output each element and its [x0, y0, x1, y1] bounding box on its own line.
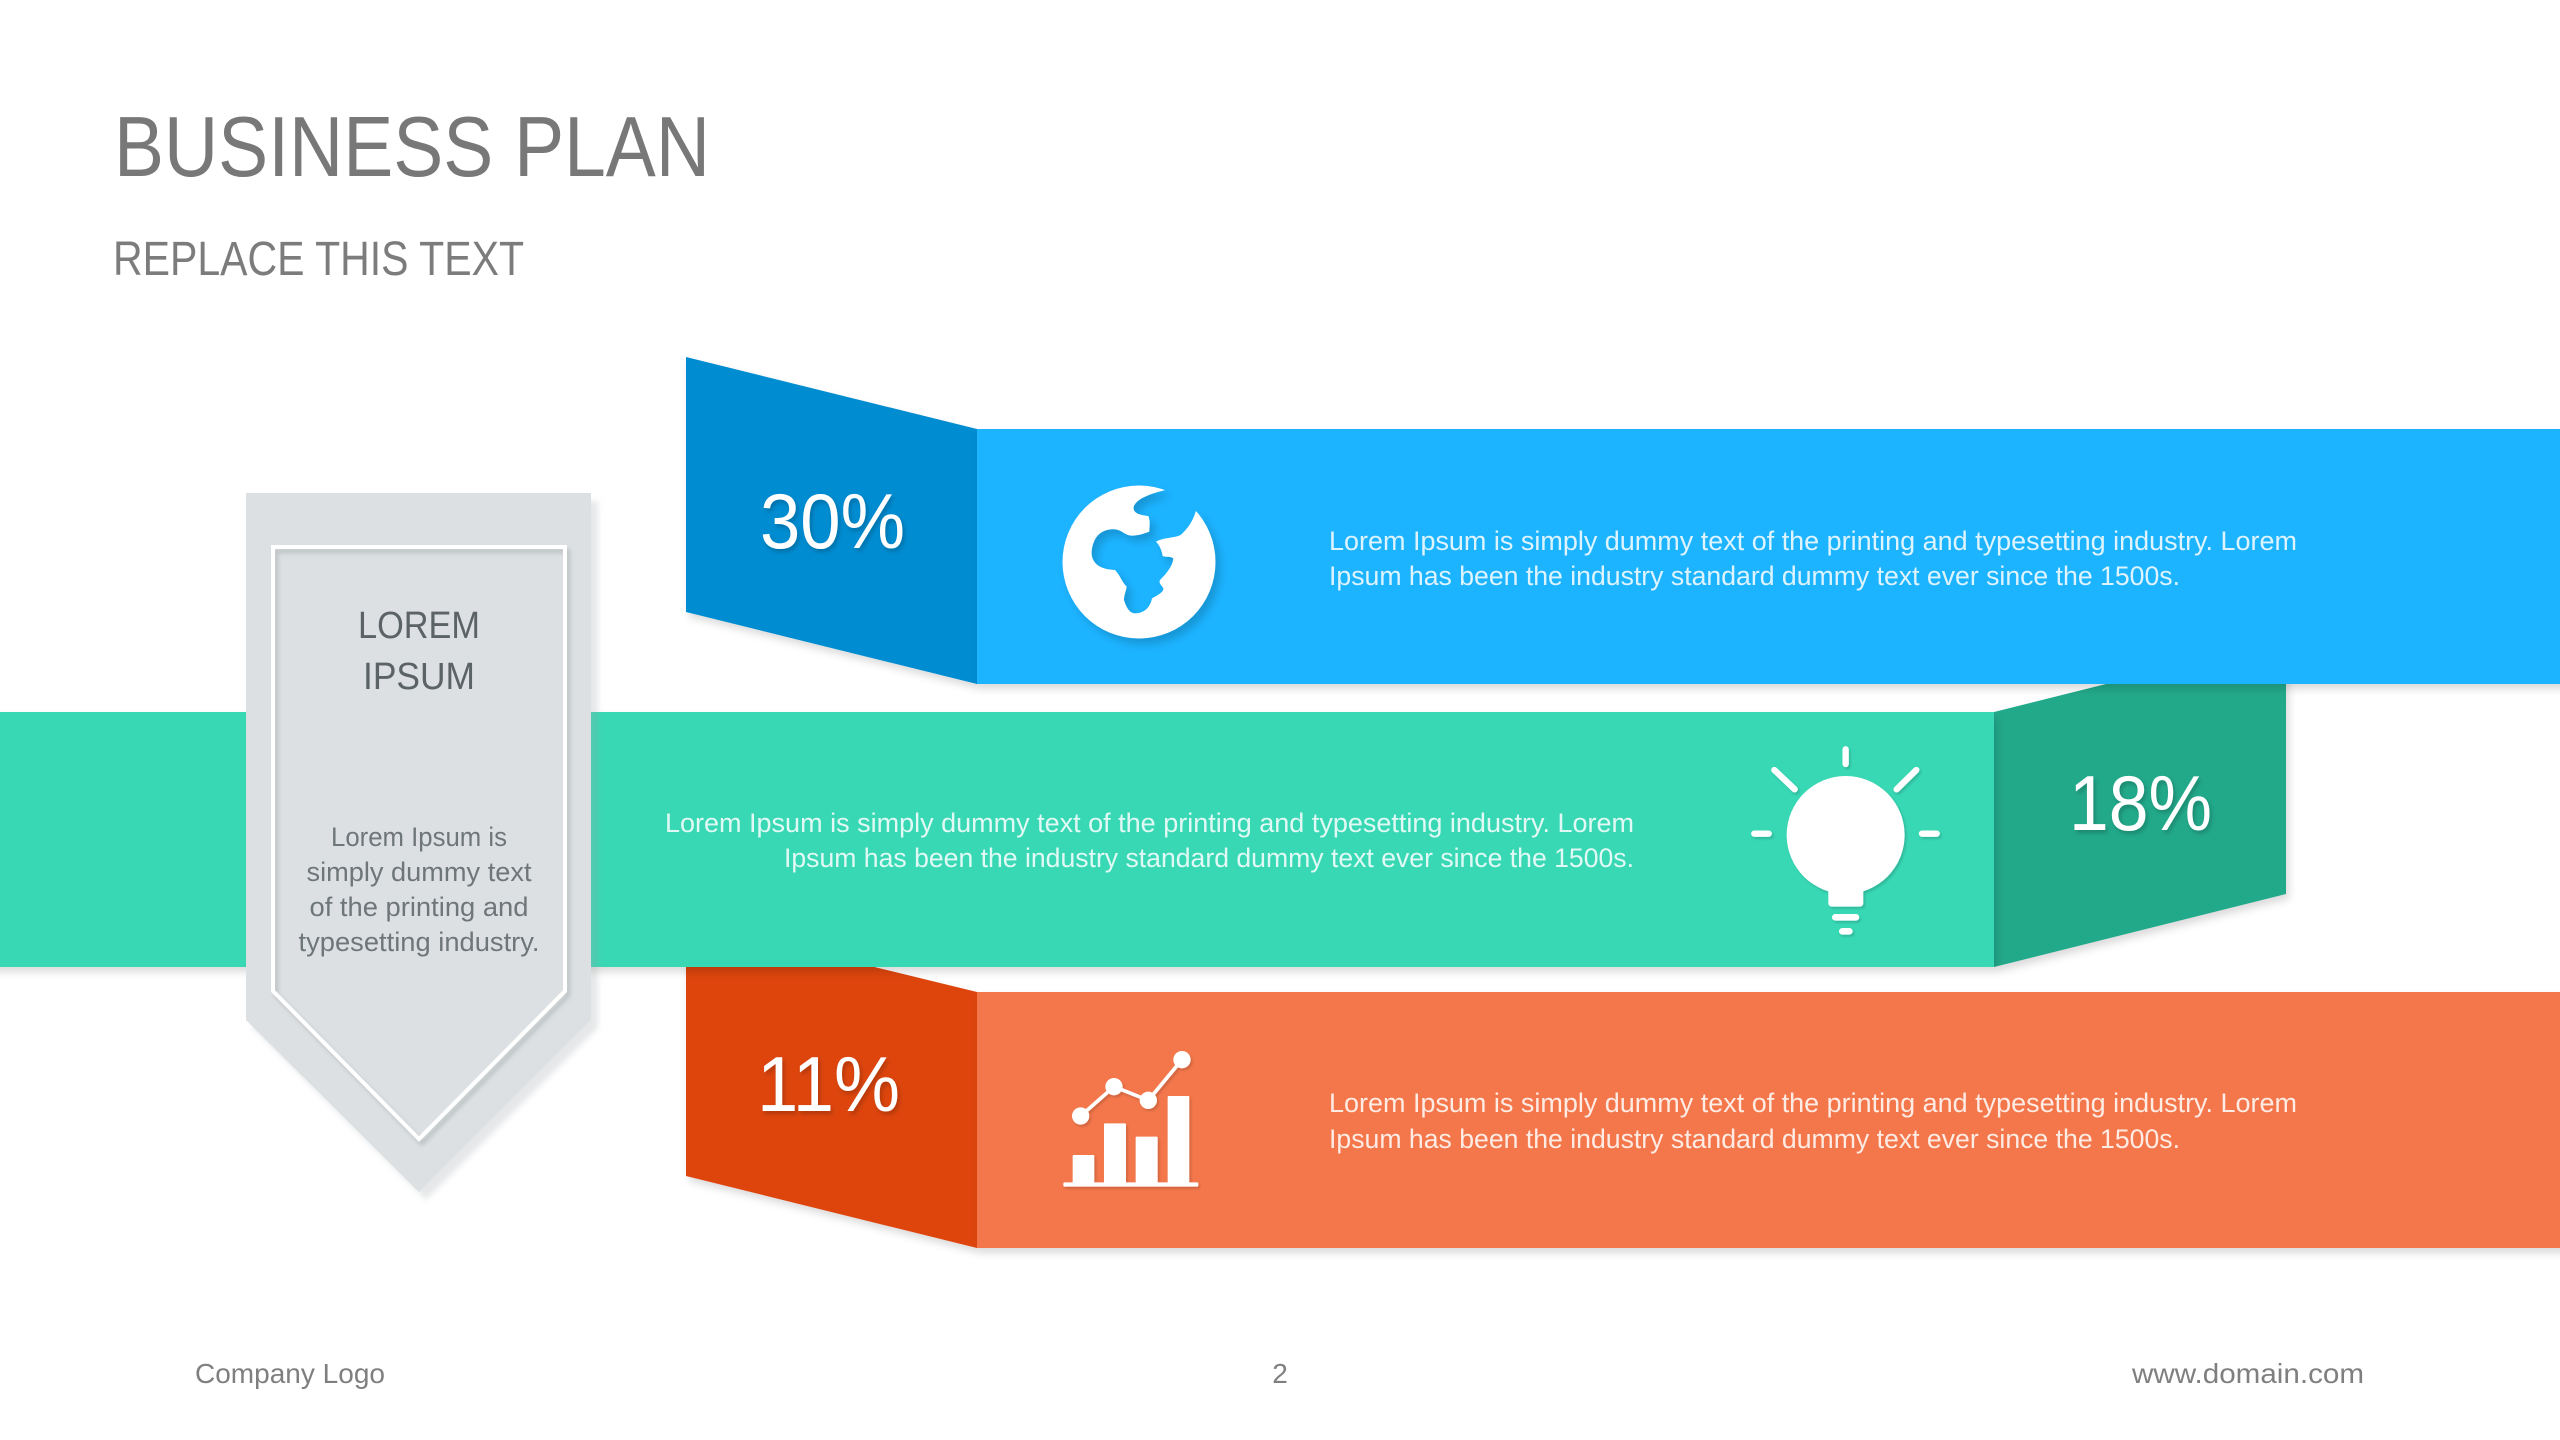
panel: blue ribbon	[686, 357, 2560, 684]
card body text: Lorem Ipsum is	[331, 822, 507, 852]
blue percentage: 30%	[760, 477, 905, 565]
card body text	[298, 822, 540, 957]
orange body text: Lorem Ipsum is simply dummy text of the printing and typesetting industry. Lorem	[1329, 1088, 2297, 1118]
green percentage: 18%	[2069, 759, 2212, 847]
icon: bar chart	[1063, 1051, 1198, 1187]
green fold	[1994, 639, 2286, 967]
orange fold	[686, 921, 977, 1248]
orange body text: Ipsum has been the industry standard dummy text ever since the 1500s.	[1329, 1124, 2180, 1154]
panel: green ribbon	[0, 639, 2286, 967]
orange band	[977, 992, 2560, 1248]
orange body text	[1329, 1088, 2297, 1154]
inner outline	[273, 547, 565, 1139]
blue band	[977, 429, 2560, 684]
footer: company logo: Company Logo	[195, 1358, 385, 1389]
blue fold	[686, 357, 977, 684]
panel: orange ribbon	[686, 921, 2560, 1248]
card heading: IPSUM	[363, 656, 475, 698]
card heading	[358, 605, 480, 698]
card heading: LOREM	[358, 605, 480, 647]
icon: light bulb	[1754, 749, 1937, 935]
card body text: of the printing and	[310, 892, 528, 922]
panel: grey tag card	[246, 493, 591, 1192]
card body text: typesetting industry.	[298, 927, 540, 957]
title: BUSINESS PLAN	[114, 100, 710, 195]
green body text: Ipsum has been the industry standard dummy text ever since the 1500s.	[784, 843, 1634, 873]
orange percentage: 11%	[757, 1040, 900, 1128]
footer: website: www.domain.com	[2131, 1358, 2364, 1389]
green band	[0, 712, 1994, 967]
footer: page number: 2	[1272, 1358, 1288, 1389]
green body text	[665, 808, 1634, 873]
card body text: simply dummy text	[306, 857, 532, 887]
blue body text: Lorem Ipsum is simply dummy text of the printing and typesetting industry. Lorem	[1329, 526, 2297, 556]
icon: globe	[1062, 486, 1216, 638]
card shape	[246, 493, 591, 1192]
green body text: Lorem Ipsum is simply dummy text of the printing and typesetting industry. Lorem	[665, 808, 1634, 838]
blue body text	[1329, 526, 2297, 591]
blue body text: Ipsum has been the industry standard dummy text ever since the 1500s.	[1329, 561, 2180, 591]
subtitle: REPLACE THIS TEXT	[113, 233, 524, 286]
